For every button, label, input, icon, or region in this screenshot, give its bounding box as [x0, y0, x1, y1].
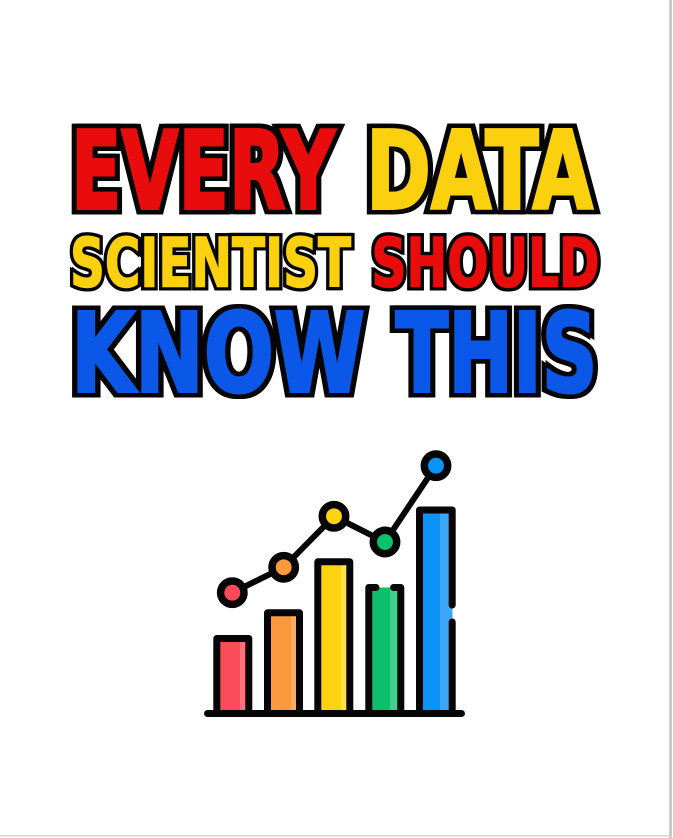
title	[69, 110, 600, 418]
title word: EVERY: EVERY	[71, 110, 336, 234]
chart baseline	[208, 710, 462, 717]
trend line	[232, 466, 436, 593]
title word: SCIENTIST: SCIENTIST	[71, 224, 352, 304]
bar: red	[217, 638, 249, 714]
title word: DATA: DATA	[366, 110, 593, 234]
title word: SCIENTIST: SCIENTIST	[69, 224, 350, 304]
bar: green	[369, 588, 401, 714]
title word: DATA: DATA	[368, 110, 595, 234]
title word: EVERY: EVERY	[73, 110, 338, 234]
icon: bar and line chart	[208, 454, 462, 714]
bar: orange	[268, 613, 300, 714]
data point: blue	[424, 454, 448, 477]
bar: blue	[420, 510, 452, 714]
title word: KNOW: KNOW	[71, 290, 365, 418]
title word: SCIENTIST: SCIENTIST	[70, 224, 351, 304]
data point: green	[373, 530, 397, 554]
data point: orange	[272, 556, 295, 579]
title word: KNOW: KNOW	[69, 290, 363, 418]
title word: THIS: THIS	[394, 290, 596, 418]
data point: red	[221, 581, 244, 604]
title word: EVERY: EVERY	[69, 110, 334, 234]
title word: DATA: DATA	[364, 110, 591, 234]
data point: yellow	[322, 505, 346, 528]
title word: EVERY	[69, 110, 338, 234]
title word: KNOW: KNOW	[73, 290, 367, 418]
bar: yellow	[318, 562, 350, 714]
